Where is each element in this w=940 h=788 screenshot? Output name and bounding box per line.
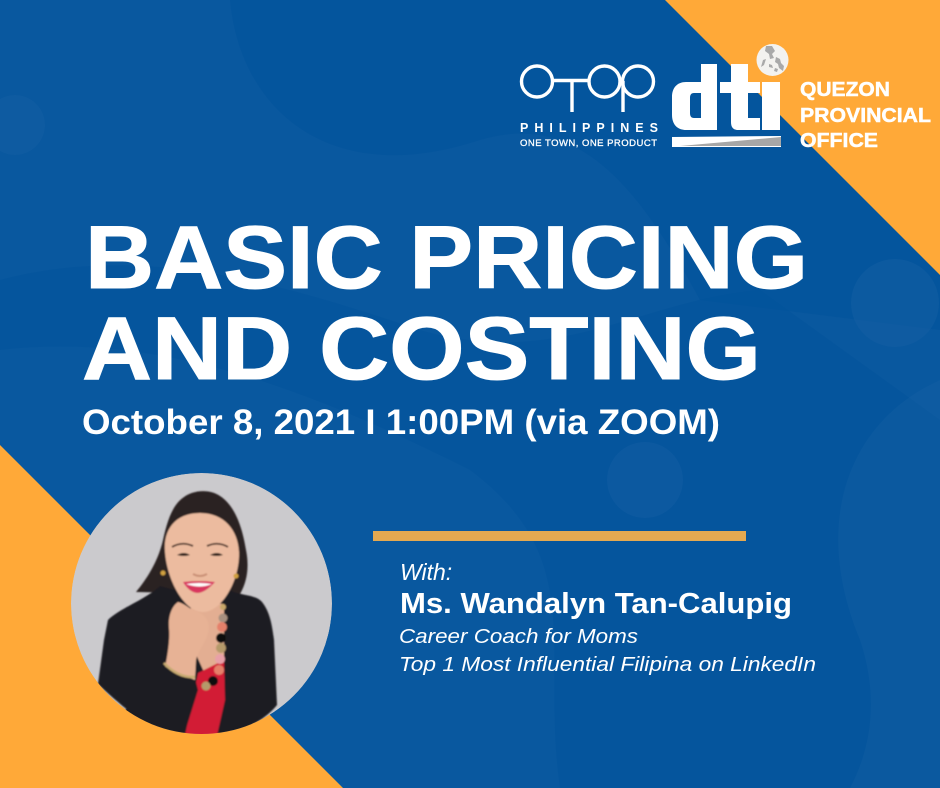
speaker details: With: (400, 559, 452, 585)
office label: OFFICE (800, 129, 878, 152)
chest skin (190, 600, 224, 672)
orange triangle top right (665, 0, 940, 275)
speaker portrait (71, 473, 332, 740)
smile (183, 581, 215, 593)
forearm and fist (164, 600, 198, 681)
date line: October 8, 2021 I 1:00PM (via ZOOM) (82, 403, 720, 442)
office label: QUEZON (800, 78, 890, 101)
logo: DTI (672, 44, 788, 147)
icon: Philippines globe (756, 44, 788, 76)
eyes and brows (177, 553, 223, 556)
title: BASIC PRICING (85, 207, 808, 307)
speaker details: Ms. Wandalyn Tan-Calupig (400, 588, 792, 620)
accent bar (373, 531, 746, 541)
logo: OTOP Philippines: PHILIPPINES (520, 121, 658, 135)
jacket (98, 586, 277, 735)
hair (136, 491, 248, 594)
title: AND COSTING (82, 298, 761, 398)
necklace (202, 604, 228, 690)
title (82, 207, 808, 398)
logo: OTOP Philippines: ONE TOWN, ONE PRODUCT (520, 138, 657, 149)
speaker details (399, 559, 816, 676)
face (165, 513, 239, 612)
red top (184, 660, 225, 740)
office label (800, 78, 931, 152)
logo: OTOP Philippines (520, 66, 658, 149)
speaker details: Top 1 Most Influential Filipina on LinkedIn (399, 654, 816, 676)
orange triangle bottom left (0, 445, 343, 788)
earrings (160, 570, 166, 576)
sleeve (125, 666, 199, 725)
bracelet (164, 663, 195, 677)
office label: PROVINCIAL (800, 104, 931, 127)
speaker details: Career Coach for Moms (399, 626, 638, 648)
nose (193, 574, 207, 576)
